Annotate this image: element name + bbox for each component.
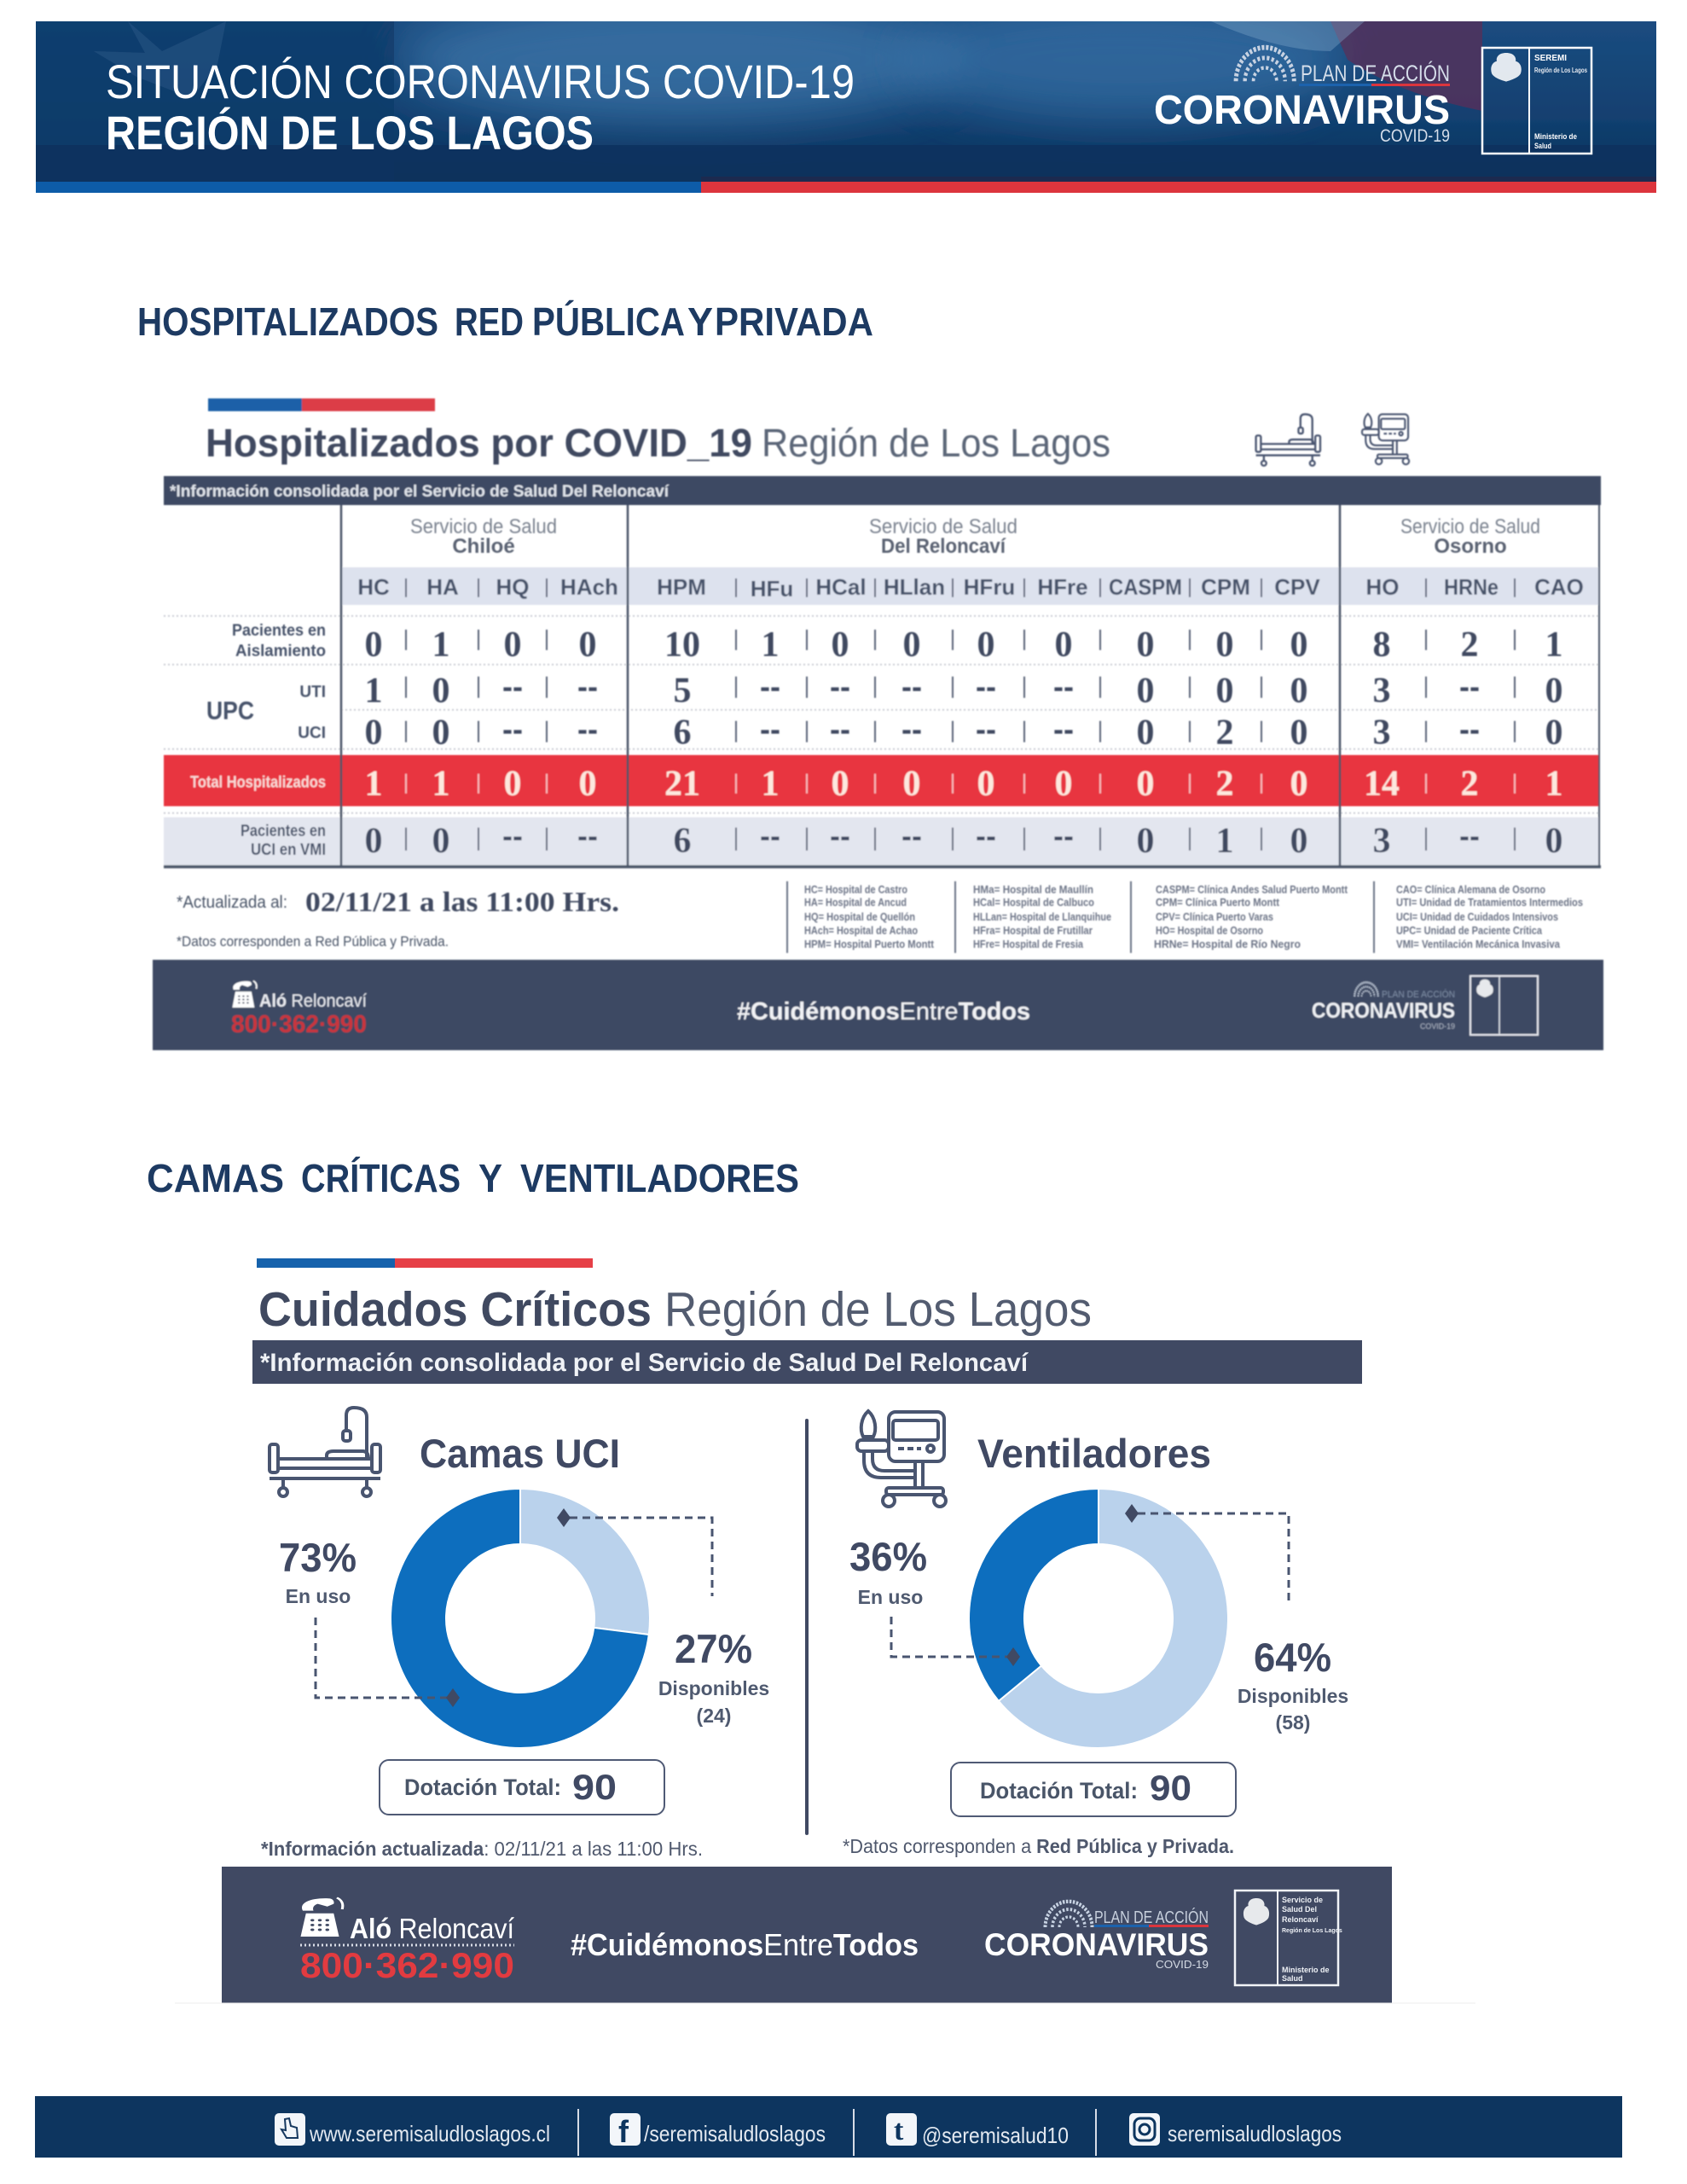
- total box: camas uci: [380, 1760, 664, 1815]
- callout: 64% disponibles: [1125, 1504, 1348, 1734]
- row: pacientes en aislamiento: 1: [1545, 625, 1562, 665]
- column headers: HFre: [1037, 574, 1088, 600]
- row: total hospitalizados: 1: [432, 764, 450, 804]
- column headers: CPM: [1201, 574, 1250, 600]
- row: uci: --: [901, 712, 922, 746]
- row: uci: --: [1459, 712, 1480, 746]
- total box: camas uci: 90: [572, 1767, 617, 1807]
- row labels: Pacientes en: [232, 622, 326, 640]
- heading: camas uci: Camas UCI: [420, 1431, 620, 1476]
- row labels: UCI: [298, 724, 326, 742]
- row: uci: 0: [1545, 713, 1562, 752]
- row labels: Pacientes en: [241, 822, 326, 840]
- info bar: [252, 1340, 1362, 1384]
- panel title: Región de Los Lagos: [762, 421, 1110, 465]
- legend: HAch= Hospital de Achao: [804, 924, 918, 937]
- panel footer: COVID-19: [1420, 1022, 1455, 1031]
- info bar: [164, 476, 1601, 505]
- panel: hospitalizados table: [153, 398, 1603, 1050]
- row: total hospitalizados: 21: [664, 764, 700, 804]
- text: twitter handle: @seremisalud10: [922, 2123, 1069, 2148]
- header background: [36, 21, 1656, 182]
- row: uci: 0: [432, 713, 450, 752]
- total box: ventiladores: [951, 1763, 1236, 1816]
- main title: [106, 55, 855, 160]
- panel footer: PLAN DE ACCIÓN: [1382, 989, 1455, 1000]
- donut chart: camas uci: [391, 1489, 650, 1748]
- heading: hospitalizados: Y: [687, 299, 713, 344]
- row: pacientes en aislamiento: 10: [664, 625, 700, 665]
- row: pacientes en uci en vmi: 1: [1216, 822, 1233, 861]
- note: informacion actualizada: *Información actualizada: 02/11/21 a las 11:00 Hrs.: [261, 1838, 703, 1860]
- row: uti: --: [502, 669, 523, 704]
- heading: camas criticas: CAMAS: [147, 1156, 284, 1200]
- column headers: HFu: [751, 576, 793, 601]
- callout: 64% disponibles: Disponibles: [1238, 1685, 1348, 1707]
- row and header shading: [164, 567, 1599, 867]
- panel title: Cuidados Críticos: [258, 1282, 652, 1337]
- row: total hospitalizados: 0: [503, 764, 522, 804]
- legend: CPV= Clínica Puerto Varas: [1156, 910, 1273, 923]
- column headers: HQ: [496, 574, 529, 600]
- row: uti: --: [1053, 669, 1074, 704]
- icon: phone: [300, 1897, 343, 1937]
- row: uci: --: [1053, 712, 1074, 746]
- row: total hospitalizados: 1: [365, 764, 382, 804]
- callout: 36% en uso: [849, 1534, 1020, 1666]
- service headers: Servicio de Salud: [1400, 515, 1540, 538]
- row: pacientes en aislamiento: 0: [1290, 625, 1308, 665]
- row: uci: --: [577, 712, 598, 746]
- column headers: HA: [426, 574, 459, 600]
- heading: camas criticas: [147, 1156, 799, 1200]
- panel footer: Aló Reloncaví: [350, 1913, 514, 1944]
- row: pacientes en uci en vmi: 6: [674, 822, 691, 861]
- legend: UPC= Unidad de Paciente Crítica: [1396, 924, 1543, 937]
- logo: seremi emblem: Región de Los Lagos: [1534, 67, 1587, 74]
- panel footer: Salud Del: [1282, 1905, 1317, 1914]
- heading: camas criticas: VENTILADORES: [520, 1156, 799, 1200]
- heading: camas criticas: CRÍTICAS: [301, 1156, 461, 1200]
- row: uti: --: [760, 669, 780, 704]
- row: pacientes en aislamiento: 0: [365, 625, 382, 665]
- row labels: Aislamiento: [235, 642, 326, 660]
- row: uci: 6: [674, 713, 691, 752]
- main title: REGIÓN DE LOS LAGOS: [106, 106, 594, 160]
- legend: CAO= Clínica Alemana de Osorno: [1396, 883, 1545, 896]
- row: total hospitalizados: 0: [831, 764, 849, 804]
- row: pacientes en aislamiento: 0: [578, 625, 597, 665]
- icon: tumblr: [886, 2113, 917, 2146]
- logo: seremi emblem: Ministerio de: [1534, 132, 1577, 141]
- separators: [406, 578, 1515, 853]
- text: instagram: seremisaludloslagos: [1168, 2121, 1342, 2146]
- row: total hospitalizados: [365, 764, 1562, 804]
- row: pacientes en aislamiento: 0: [902, 625, 921, 665]
- row: pacientes en aislamiento: [365, 625, 1562, 665]
- legend: UCI= Unidad de Cuidados Intensivos: [1396, 910, 1558, 923]
- logo: plan de acción coronavirus: COVID-19: [1380, 126, 1450, 146]
- logo: plan de acción coronavirus: PLAN DE ACCIÓN: [1301, 60, 1450, 86]
- row: pacientes en uci en vmi: --: [830, 818, 850, 853]
- row: total hospitalizados: 0: [1136, 764, 1155, 804]
- row: pacientes en uci en vmi: 3: [1373, 822, 1390, 861]
- panel footer: PLAN DE ACCIÓN: [1094, 1908, 1209, 1927]
- callout: 27% disponibles: [557, 1508, 769, 1727]
- legend: HPM= Hospital Puerto Montt: [804, 938, 935, 950]
- row: uti: --: [577, 669, 598, 704]
- row: uti: 1: [365, 671, 382, 711]
- callout: 73% en uso: 73%: [279, 1535, 357, 1580]
- main title: SITUACIÓN CORONAVIRUS COVID-19: [106, 55, 855, 108]
- heading: hospitalizados: PÚBLICA: [532, 299, 685, 344]
- row: pacientes en uci en vmi: --: [1459, 818, 1480, 853]
- row: total hospitalizados: 0: [1054, 764, 1073, 804]
- column headers: HAch: [560, 574, 618, 600]
- row: uti: 0: [1136, 671, 1155, 711]
- icon: facebook: f: [618, 2114, 629, 2149]
- row labels: UTI: [299, 683, 326, 701]
- icon: bed: [270, 1408, 380, 1496]
- column headers: HPM: [657, 574, 706, 600]
- logo: seremi emblem: SEREMI: [1534, 54, 1567, 63]
- legend: HRNe= Hospital de Río Negro: [1154, 938, 1301, 950]
- header stripe: [36, 177, 1656, 193]
- logo: seremi emblem: Salud: [1534, 142, 1551, 150]
- callout: 64% disponibles: (58): [1276, 1711, 1310, 1734]
- row: uti: --: [1459, 669, 1480, 704]
- column headers: CPV: [1274, 574, 1320, 600]
- row labels: UPC: [206, 697, 254, 725]
- info bar: *Información consolidada por el Servicio de Salud Del Reloncaví: [170, 483, 670, 501]
- icon: ventilator: [857, 1411, 946, 1507]
- heading: hospitalizados: RED: [455, 299, 524, 344]
- icon: ventilator small: [1362, 414, 1409, 464]
- panel footer: Región de Los Lagos: [1282, 1928, 1342, 1934]
- icon: bed small: [1256, 415, 1320, 466]
- service headers: Chiloé: [452, 535, 515, 558]
- callout: 73% en uso: [279, 1535, 460, 1707]
- legend: UTI= Unidad de Tratamientos Intermedios: [1396, 896, 1583, 909]
- column headers: CAO: [1534, 574, 1584, 600]
- heading: hospitalizados: [137, 299, 873, 344]
- column headers: HLlan: [884, 574, 945, 600]
- total box: ventiladores: 90: [1150, 1768, 1191, 1808]
- panel footer: Salud: [1282, 1974, 1303, 1983]
- legend: HCal= Hospital de Calbuco: [973, 896, 1094, 909]
- callout: 36% en uso: En uso: [858, 1586, 923, 1608]
- logo: seremi emblem: [1482, 48, 1591, 154]
- logo: plan de acción coronavirus: [1154, 48, 1450, 146]
- column headers: [357, 574, 1584, 601]
- row: uti: --: [830, 669, 850, 704]
- row: pacientes en uci en vmi: 0: [1545, 822, 1562, 861]
- row: pacientes en uci en vmi: --: [976, 818, 996, 853]
- total box: camas uci: Dotación Total:: [404, 1774, 561, 1800]
- callout: 64% disponibles: 64%: [1254, 1635, 1331, 1680]
- row: pacientes en aislamiento: 0: [977, 625, 994, 665]
- header banner: [36, 21, 1656, 193]
- panel footer: CORONAVIRUS: [984, 1927, 1209, 1962]
- row: pacientes en aislamiento: 8: [1373, 625, 1390, 665]
- panel title: Región de Los Lagos: [664, 1282, 1092, 1337]
- callout: 73% en uso: En uso: [286, 1585, 351, 1607]
- column headers: CASPM: [1109, 574, 1182, 600]
- heading: camas criticas: Y: [478, 1156, 502, 1200]
- row: pacientes en uci en vmi: --: [760, 818, 780, 853]
- callout: 27% disponibles: 27%: [675, 1626, 752, 1671]
- row: uci: --: [502, 712, 523, 746]
- row: total hospitalizados: 2: [1216, 764, 1233, 804]
- update note: *Actualizada al:: [177, 893, 287, 912]
- panel footer: Ministerio de: [1282, 1966, 1330, 1974]
- callout: 36% en uso: 36%: [849, 1534, 927, 1579]
- heading: hospitalizados: PRIVADA: [715, 299, 873, 344]
- row: pacientes en aislamiento: 1: [432, 625, 450, 665]
- row: uci: 0: [1136, 713, 1155, 752]
- icon: tumblr: t: [894, 2115, 904, 2146]
- row: pacientes en uci en vmi: --: [577, 818, 598, 853]
- row: pacientes en aislamiento: 0: [831, 625, 849, 665]
- row: total hospitalizados: 0: [578, 764, 597, 804]
- row: total hospitalizados: 2: [1460, 764, 1479, 804]
- row: uci: 2: [1216, 713, 1233, 752]
- panel title: Hospitalizados por COVID_19: [206, 421, 752, 465]
- legend: HQ= Hospital de Quellón: [804, 910, 915, 923]
- row: uci: --: [760, 712, 780, 746]
- row: pacientes en uci en vmi: 0: [1290, 822, 1308, 861]
- callout: 27% disponibles: (24): [697, 1705, 731, 1727]
- legend: HLLan= Hospital de Llanquihue: [973, 910, 1111, 923]
- row: pacientes en uci en vmi: --: [1053, 818, 1074, 853]
- column headers: HFru: [964, 574, 1015, 600]
- panel: cuidados criticos: [175, 1258, 1475, 2003]
- row: total hospitalizados: 1: [761, 764, 780, 804]
- row labels: [190, 622, 326, 859]
- panel footer: [153, 960, 1603, 1050]
- row labels: Total Hospitalizados: [190, 774, 326, 792]
- row: pacientes en aislamiento: 0: [503, 625, 522, 665]
- row: pacientes en aislamiento: 0: [1136, 625, 1155, 665]
- row: uci: [365, 712, 1562, 752]
- legend: HFra= Hospital de Frutillar: [973, 924, 1093, 937]
- legend: HA= Hospital de Ancud: [804, 896, 907, 909]
- legend: VMI= Ventilación Mecánica Invasiva: [1396, 938, 1561, 950]
- note: datos corresponden: *Datos corresponden a Red Pública y Privada.: [843, 1835, 1234, 1857]
- column headers: HO: [1366, 574, 1399, 600]
- update note: [177, 887, 619, 950]
- update note: *Datos corresponden a Red Pública y Privada.: [177, 933, 449, 950]
- legend: CPM= Clínica Puerto Montt: [1156, 896, 1280, 909]
- column headers: HC: [357, 574, 390, 600]
- panel title: [206, 421, 1110, 465]
- column headers: HCal: [815, 574, 867, 600]
- row labels: UCI en VMI: [251, 841, 326, 859]
- row: uci: 0: [1290, 713, 1308, 752]
- row: total hospitalizados: 0: [977, 764, 994, 804]
- accent bar: [257, 1258, 593, 1268]
- service headers: Servicio de Salud: [869, 515, 1017, 538]
- service headers: Osorno: [1434, 535, 1507, 558]
- panel footer: CORONAVIRUS: [1312, 999, 1455, 1023]
- row: uti: 0: [432, 671, 450, 711]
- panel footer: Reloncaví: [1282, 1915, 1319, 1924]
- service headers: Servicio de Salud: [410, 515, 557, 538]
- accent bar: [208, 398, 435, 411]
- info bar: *Información consolidada por el Servicio de Salud Del Reloncaví: [260, 1349, 1029, 1377]
- icon: facebook: [610, 2113, 641, 2149]
- row: pacientes en aislamiento: 2: [1460, 625, 1479, 665]
- bottom social bar: [35, 2096, 1622, 2158]
- row: pacientes en uci en vmi: 0: [432, 822, 450, 861]
- icon: website: [275, 2113, 305, 2146]
- row: pacientes en uci en vmi: --: [901, 818, 922, 853]
- row: uci: 3: [1373, 713, 1390, 752]
- row: pacientes en uci en vmi: 0: [365, 822, 382, 861]
- update note: 02/11/21 a las 11:00 Hrs.: [305, 887, 619, 918]
- legend: HMa= Hospital de Maullín: [973, 883, 1093, 896]
- row: uti: 0: [1545, 671, 1562, 711]
- row: total hospitalizados: 14: [1364, 764, 1400, 804]
- panel footer: COVID-19: [1156, 1958, 1209, 1971]
- panel footer: 800·362·990: [300, 1945, 514, 1985]
- panel title: [258, 1282, 1092, 1337]
- row: uti: 0: [1216, 671, 1233, 711]
- row: uti: --: [901, 669, 922, 704]
- panel footer: [175, 1867, 1475, 2003]
- row: uti: --: [976, 669, 996, 704]
- panel footer: 800·362·990: [231, 1011, 367, 1038]
- heading: hospitalizados: HOSPITALIZADOS: [137, 299, 438, 344]
- panel footer: Aló Reloncaví: [259, 991, 367, 1011]
- heading: ventiladores: Ventiladores: [977, 1431, 1211, 1476]
- divider: [805, 1419, 809, 1835]
- row: pacientes en aislamiento: 0: [1054, 625, 1073, 665]
- legend: HO= Hospital de Osorno: [1156, 924, 1263, 937]
- text: facebook: /seremisaludloslagos: [644, 2121, 826, 2146]
- legend: HFre= Hospital de Fresia: [973, 938, 1084, 950]
- row: total hospitalizados: 1: [1545, 764, 1562, 804]
- legend: [787, 881, 1583, 953]
- panel footer: Servicio de: [1282, 1896, 1323, 1904]
- row: uti: 3: [1373, 671, 1390, 711]
- text: website: www.seremisaludloslagos.cl: [309, 2121, 550, 2146]
- row: pacientes en uci en vmi: [365, 818, 1562, 861]
- table frame lines: [164, 505, 1601, 867]
- legend: HC= Hospital de Castro: [804, 883, 907, 896]
- total box: ventiladores: Dotación Total:: [980, 1778, 1138, 1804]
- icon: instagram: [1129, 2113, 1160, 2146]
- legend: CASPM= Clínica Andes Salud Puerto Montt: [1156, 883, 1348, 896]
- row: uci: --: [976, 712, 996, 746]
- logo: plan de acción coronavirus: CORONAVIRUS: [1154, 88, 1450, 133]
- column headers: HRNe: [1444, 574, 1499, 600]
- row: uci: 0: [365, 713, 382, 752]
- service headers: Del Reloncaví: [881, 535, 1006, 558]
- row: pacientes en uci en vmi: 0: [1136, 822, 1155, 861]
- row: uci: --: [830, 712, 850, 746]
- row: total hospitalizados: 0: [1290, 764, 1308, 804]
- donut chart: ventiladores: [969, 1489, 1228, 1748]
- callout: 27% disponibles: Disponibles: [658, 1677, 769, 1699]
- service headers: [410, 515, 1540, 558]
- row: uti: 0: [1290, 671, 1308, 711]
- row: uti: 5: [674, 671, 691, 711]
- row: uti: [365, 669, 1562, 711]
- panel footer: #CuidémonosEntreTodos: [737, 998, 1030, 1025]
- row: pacientes en uci en vmi: --: [502, 818, 523, 853]
- panel footer: #CuidémonosEntreTodos: [571, 1927, 919, 1962]
- row: total hospitalizados: 0: [902, 764, 921, 804]
- row: pacientes en aislamiento: 1: [761, 625, 780, 665]
- row: pacientes en aislamiento: 0: [1216, 625, 1233, 665]
